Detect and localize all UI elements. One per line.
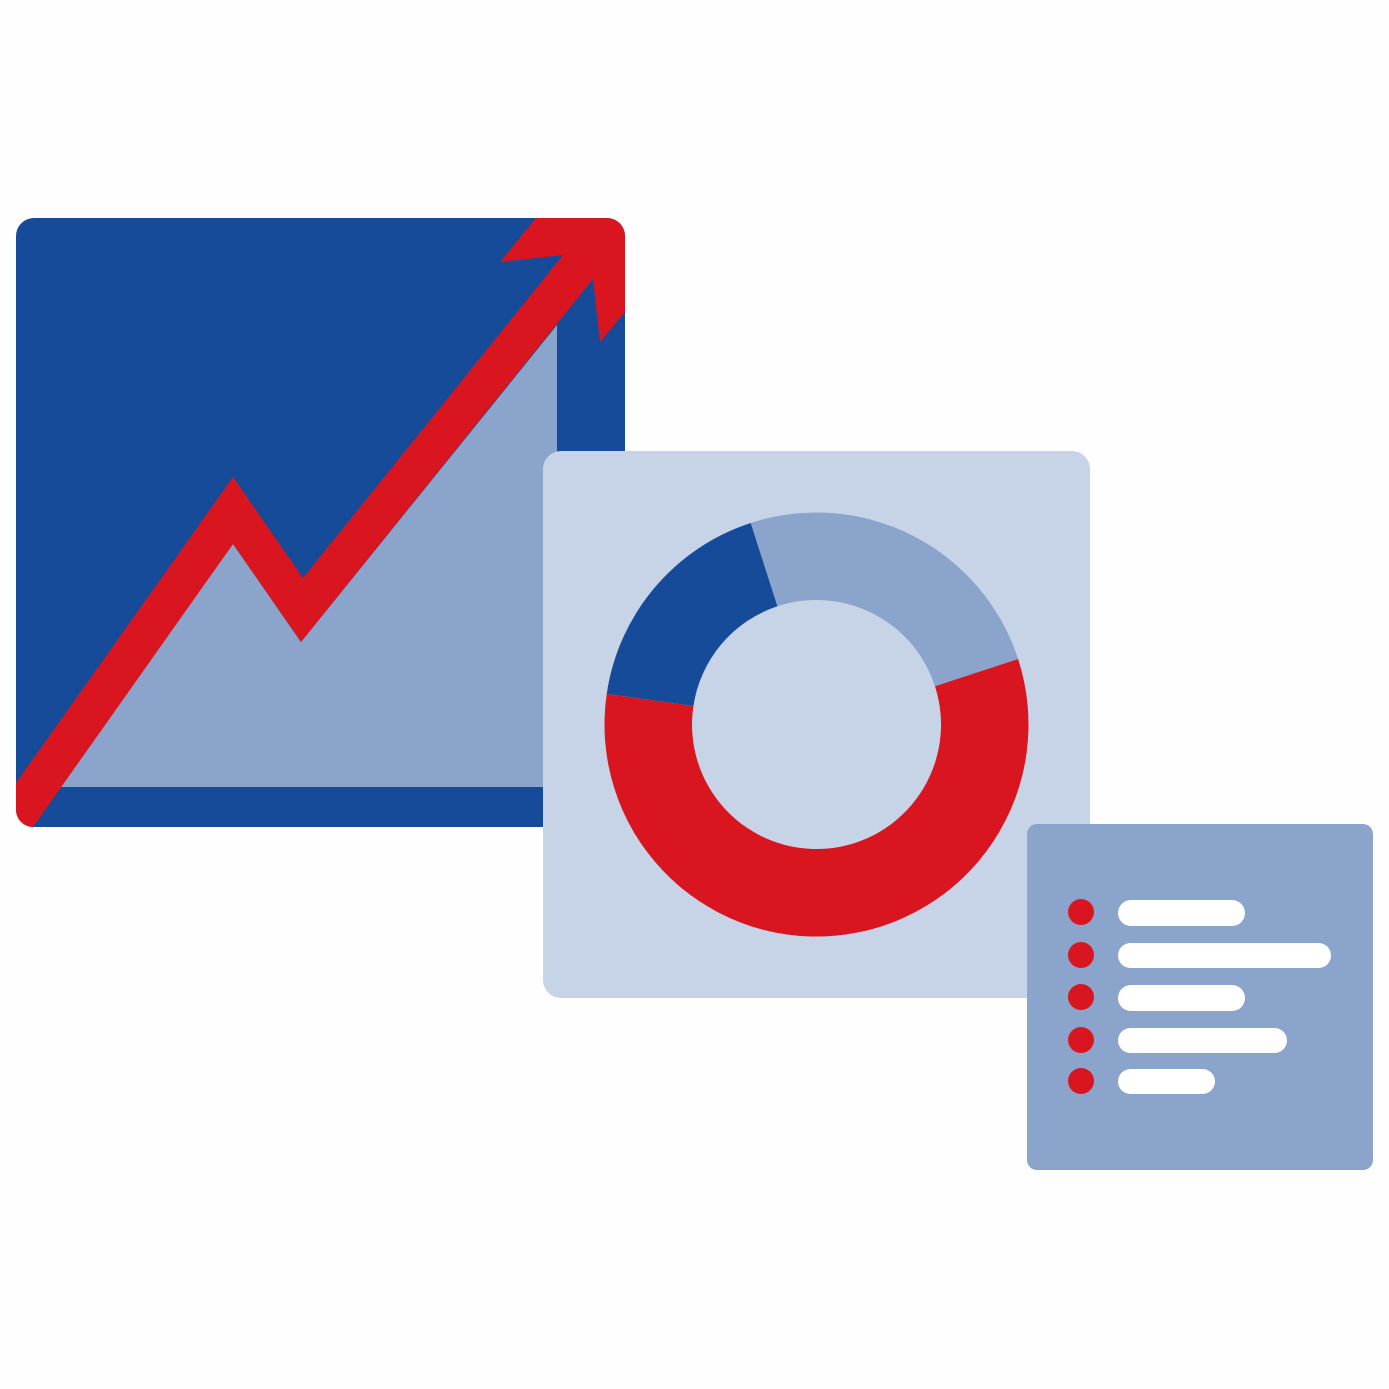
panel: donut chart bbox=[543, 451, 1090, 998]
chart panel background bbox=[16, 218, 625, 827]
list row 5 bbox=[1068, 1068, 1215, 1094]
list row 1 bbox=[1068, 899, 1245, 926]
list row 3 bbox=[1068, 984, 1245, 1011]
panel: bullet list bbox=[1027, 824, 1373, 1170]
donut segment: light blue bbox=[751, 513, 1018, 686]
donut segment: red bbox=[604, 659, 1028, 937]
list panel background bbox=[1027, 824, 1373, 1170]
list row 2 bbox=[1068, 942, 1331, 968]
list row 4 bbox=[1068, 1027, 1287, 1053]
rising arrow bbox=[16, 218, 625, 827]
donut panel background bbox=[543, 451, 1090, 998]
panel: line chart bbox=[16, 218, 625, 827]
donut segment: dark blue bbox=[607, 523, 777, 706]
area under line bbox=[60, 325, 557, 787]
